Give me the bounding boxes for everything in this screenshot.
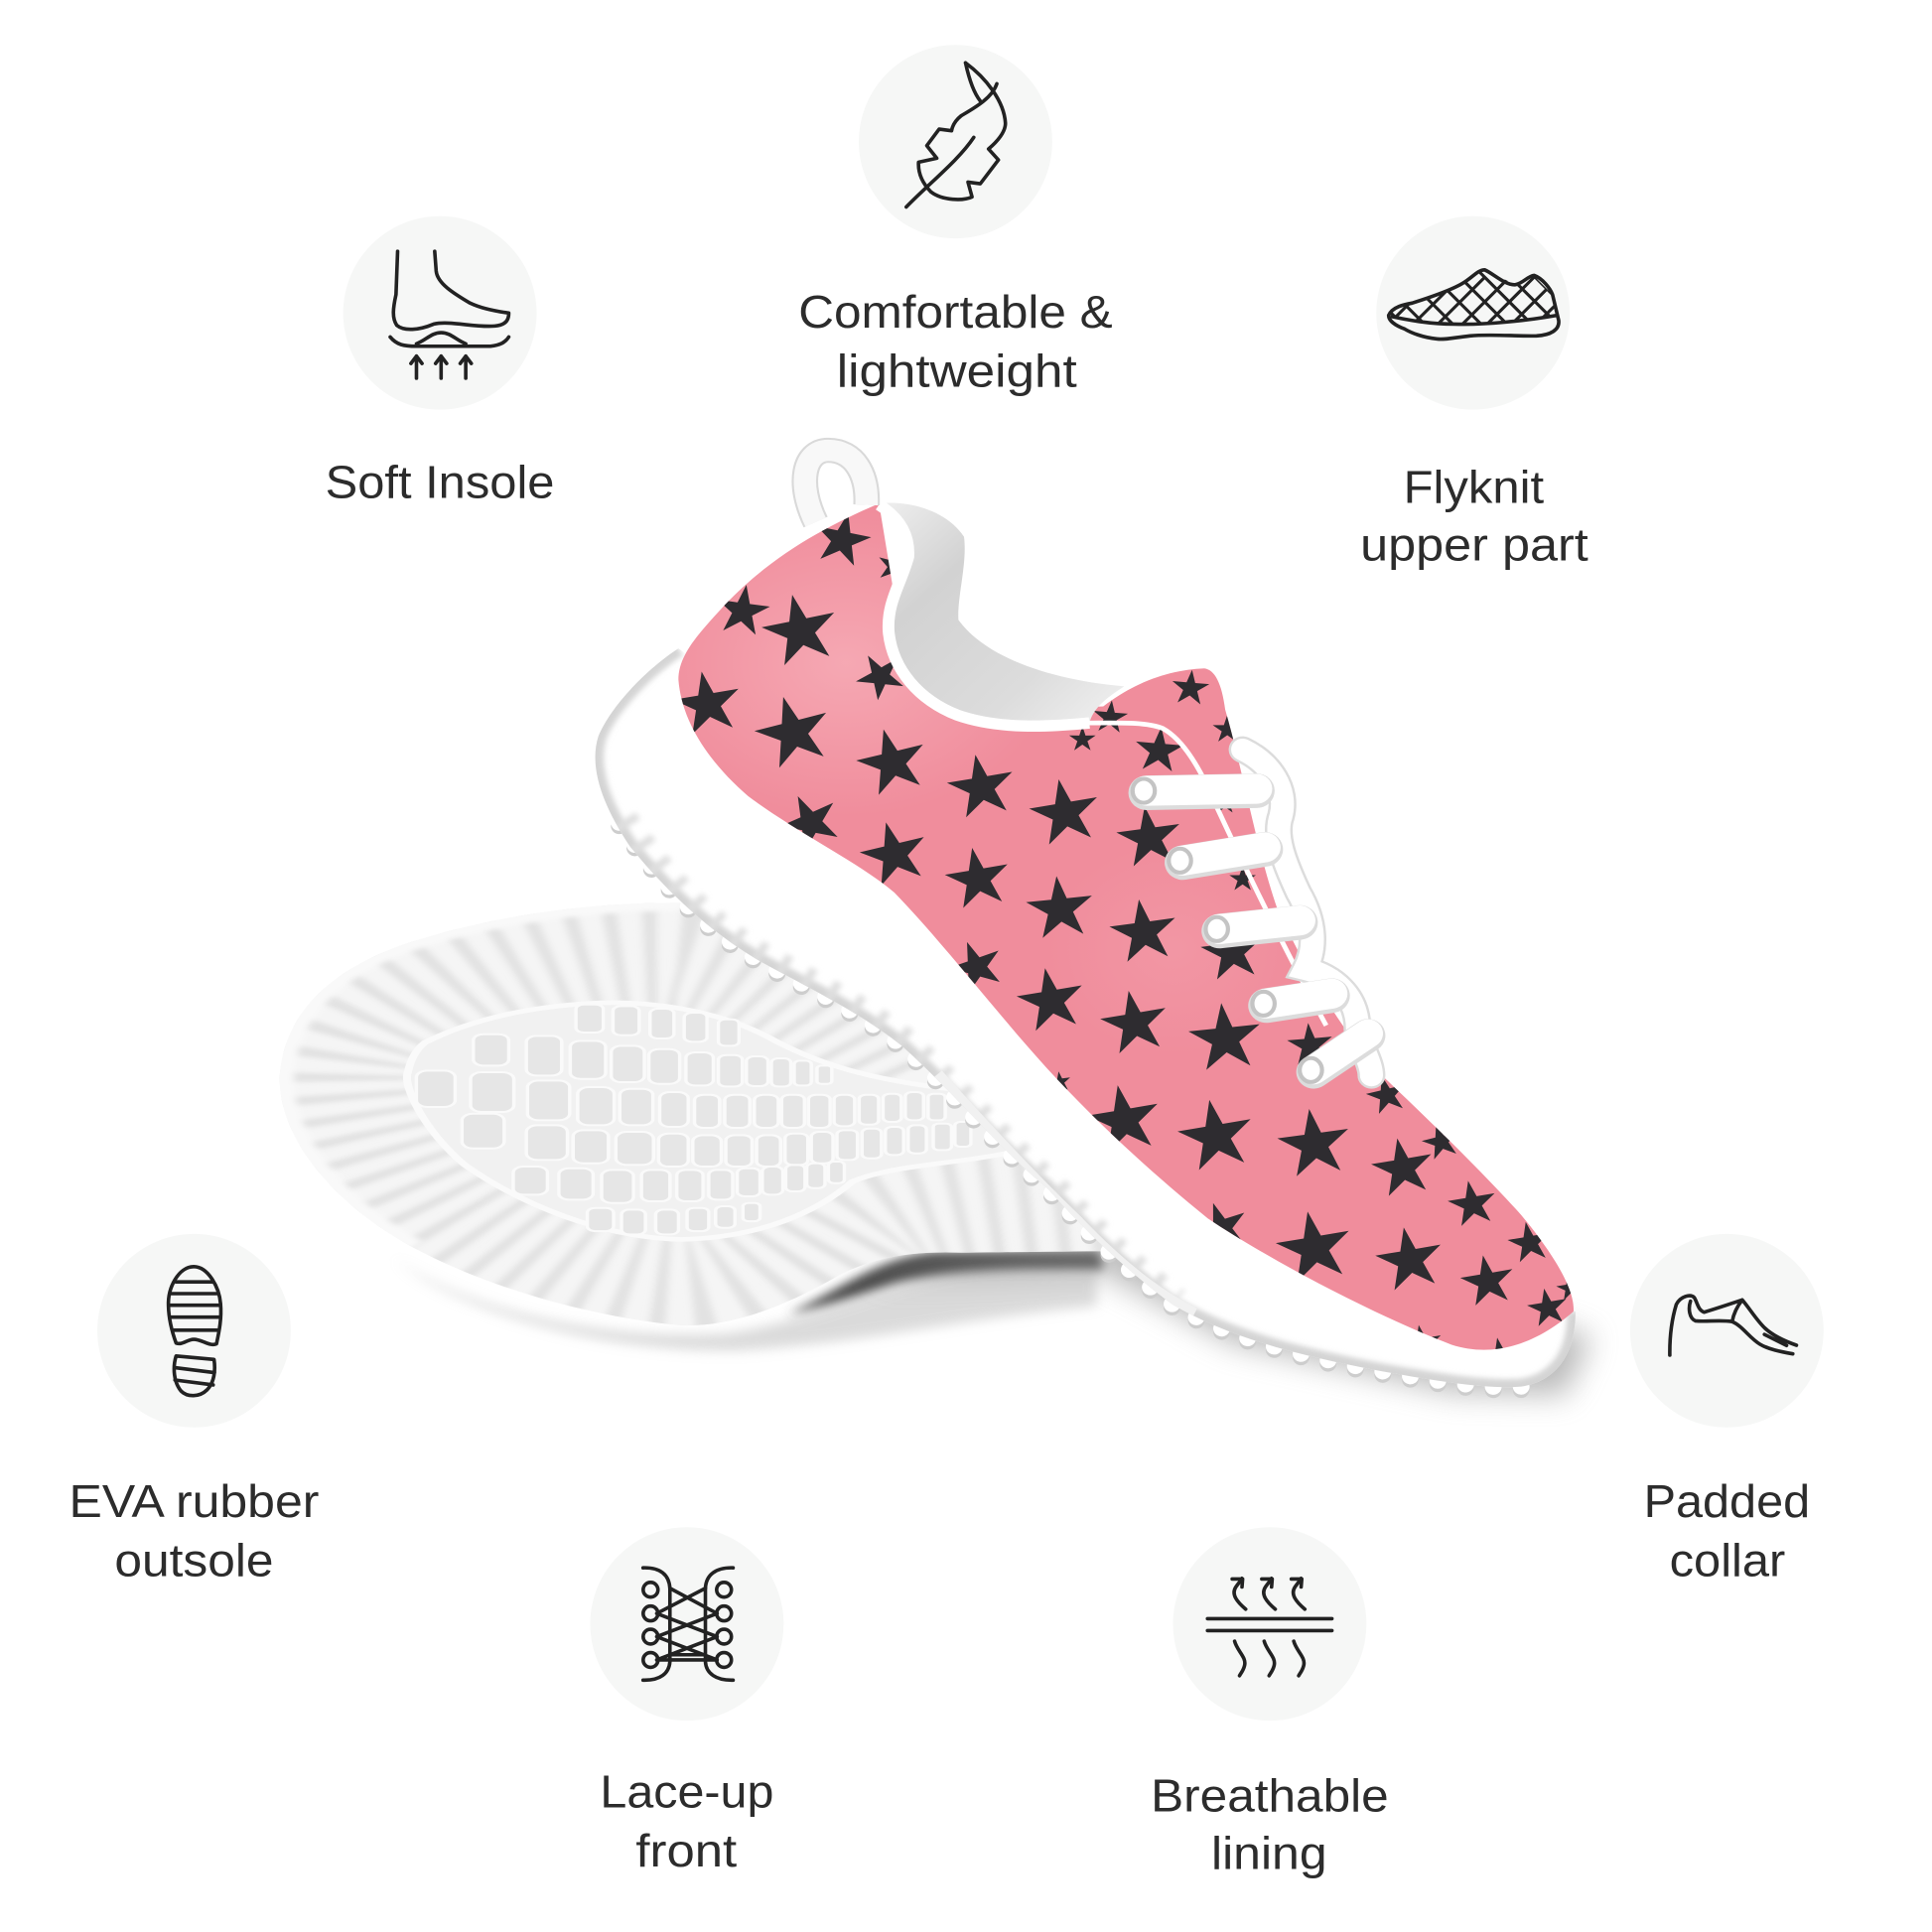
label: lightweight <box>837 345 1077 397</box>
label: collar <box>1670 1534 1785 1586</box>
label: Flyknit <box>1404 461 1544 512</box>
ground shadows <box>394 1232 1591 1395</box>
icon: collar profile <box>1630 1234 1824 1428</box>
product photo: pair of pink star sneakers <box>280 451 1591 1395</box>
tread area <box>407 1003 1015 1239</box>
feature: lace-up front <box>590 1527 783 1876</box>
feature: padded collar <box>1630 1234 1824 1586</box>
label: outsole <box>114 1534 274 1586</box>
label: front <box>635 1825 737 1876</box>
icon: feather <box>859 45 1052 238</box>
icon: foot with insole <box>344 216 536 410</box>
collar rim <box>879 505 1326 1026</box>
collar lining <box>879 503 1124 727</box>
label: Padded <box>1644 1475 1810 1527</box>
label: upper part <box>1360 519 1588 571</box>
pink upper <box>678 503 1574 1350</box>
icon: shoe print <box>97 1234 291 1428</box>
icon: airflow through layers <box>1173 1527 1366 1721</box>
midsole <box>596 648 1576 1391</box>
label: Lace-up <box>600 1766 773 1818</box>
label: EVA rubber <box>69 1475 319 1527</box>
label: Comfortable & <box>798 286 1113 338</box>
feature: comfortable & lightweight <box>798 45 1113 397</box>
icon: laces and eyelets <box>590 1527 783 1721</box>
rear shoe outsole <box>280 902 1109 1325</box>
knit sheen and star print <box>636 507 1585 1371</box>
front shoe: pink upper with black stars <box>596 451 1585 1391</box>
feature: breathable lining <box>1151 1527 1389 1879</box>
label: Breathable <box>1151 1769 1389 1821</box>
label: Soft Insole <box>326 456 554 507</box>
pull loop <box>805 451 867 522</box>
feature: EVA rubber outsole <box>69 1234 319 1586</box>
label: lining <box>1211 1828 1327 1879</box>
icon: knit sneaker <box>1376 216 1570 409</box>
feature: flyknit upper part <box>1360 216 1589 571</box>
eyelets <box>1133 778 1322 1082</box>
feature: soft insole <box>326 216 554 507</box>
laces <box>1147 750 1371 1075</box>
